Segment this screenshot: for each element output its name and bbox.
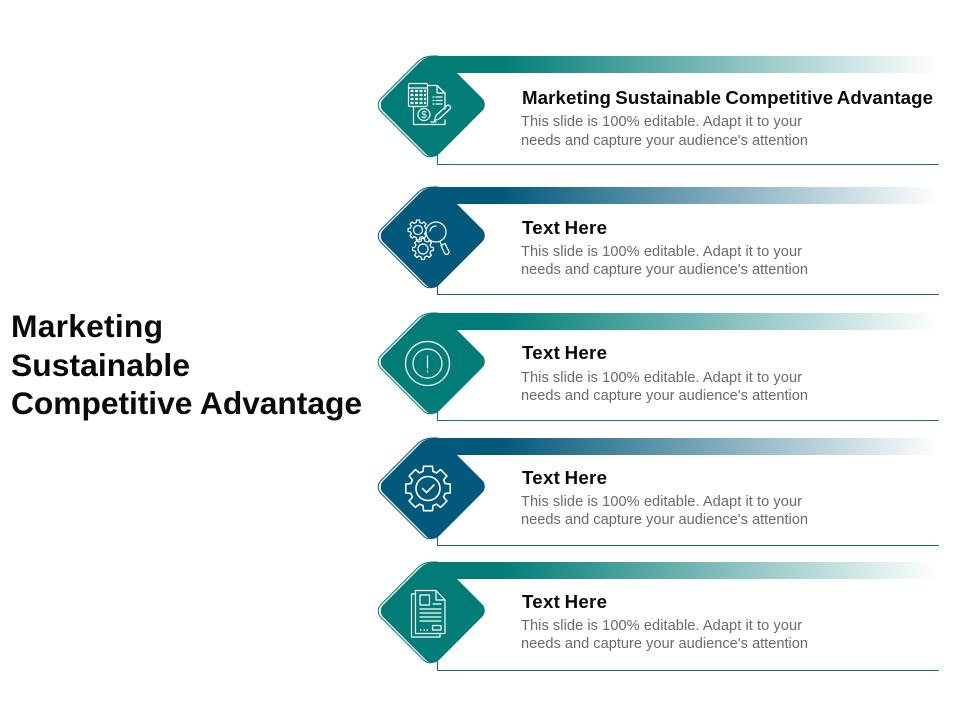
frame line 3 — [438, 405, 939, 420]
body text 5 — [521, 618, 808, 652]
icon: document — [412, 590, 445, 637]
accent bar 4 — [430, 438, 939, 455]
heading 3: Text Here — [522, 342, 607, 363]
panel: row 5 document — [378, 562, 939, 670]
frame line 1 — [438, 150, 939, 164]
icon: alert circle — [406, 342, 450, 386]
diamond 2 — [381, 187, 485, 288]
accent bar 2 — [430, 187, 939, 204]
body text 2: This slide is 100% editable. Adapt it to your — [521, 244, 802, 260]
accent bar 3 — [430, 313, 939, 330]
accent bar 5 — [430, 562, 939, 579]
title: Marketing — [11, 308, 163, 344]
frame line 5 — [438, 655, 939, 670]
icon: calculator and document: $ — [421, 110, 427, 121]
panel: row 4 gear check — [378, 438, 939, 546]
body text 1 — [521, 114, 808, 149]
body text 4: This slide is 100% editable. Adapt it to your — [521, 494, 802, 510]
heading 2: Text Here — [522, 217, 607, 238]
frame line 4 — [438, 530, 939, 546]
title: Competitive Advantage — [11, 385, 362, 421]
accent bar 1 — [430, 56, 939, 73]
panel: row 1 calculator and finance — [378, 56, 939, 164]
diamond 1 — [381, 56, 485, 157]
diamond outline 5 — [378, 562, 482, 663]
icon: gears and magnifier — [408, 220, 449, 259]
icon: calculator and document — [408, 84, 451, 124]
icon: gear with check — [406, 466, 450, 511]
body text 4 — [521, 494, 808, 528]
title — [11, 308, 362, 421]
title: Sustainable — [11, 347, 190, 383]
diamond outline 1 — [378, 56, 482, 157]
panel: row 3 alert circle — [378, 313, 939, 420]
body text 5: This slide is 100% editable. Adapt it to your — [521, 618, 802, 634]
body text 3 — [521, 370, 808, 404]
body text 2: needs and capture your audience's attention — [521, 262, 808, 278]
body text 1: needs and capture your audience's attention — [521, 133, 808, 149]
body text 3: needs and capture your audience's attention — [521, 388, 808, 404]
body text 4: needs and capture your audience's attention — [521, 512, 808, 528]
diamond 4 — [381, 438, 485, 539]
heading 4: Text Here — [522, 467, 607, 488]
diamond outline 4 — [378, 438, 482, 539]
diamond 5 — [381, 562, 485, 663]
body text 2 — [521, 244, 808, 278]
frame line 2 — [438, 280, 939, 294]
panel: row 2 gears and magnifier — [378, 187, 939, 294]
body text 5: needs and capture your audience's attention — [521, 636, 808, 652]
diamond outline 3 — [378, 313, 482, 414]
heading 1: Marketing Sustainable Competitive Advantage — [522, 87, 933, 108]
diamond outline 2 — [378, 187, 482, 288]
body text 1: This slide is 100% editable. Adapt it to your — [521, 114, 802, 130]
body text 3: This slide is 100% editable. Adapt it to your — [521, 370, 802, 386]
heading 5: Text Here — [522, 591, 607, 612]
diamond 3 — [381, 313, 485, 414]
